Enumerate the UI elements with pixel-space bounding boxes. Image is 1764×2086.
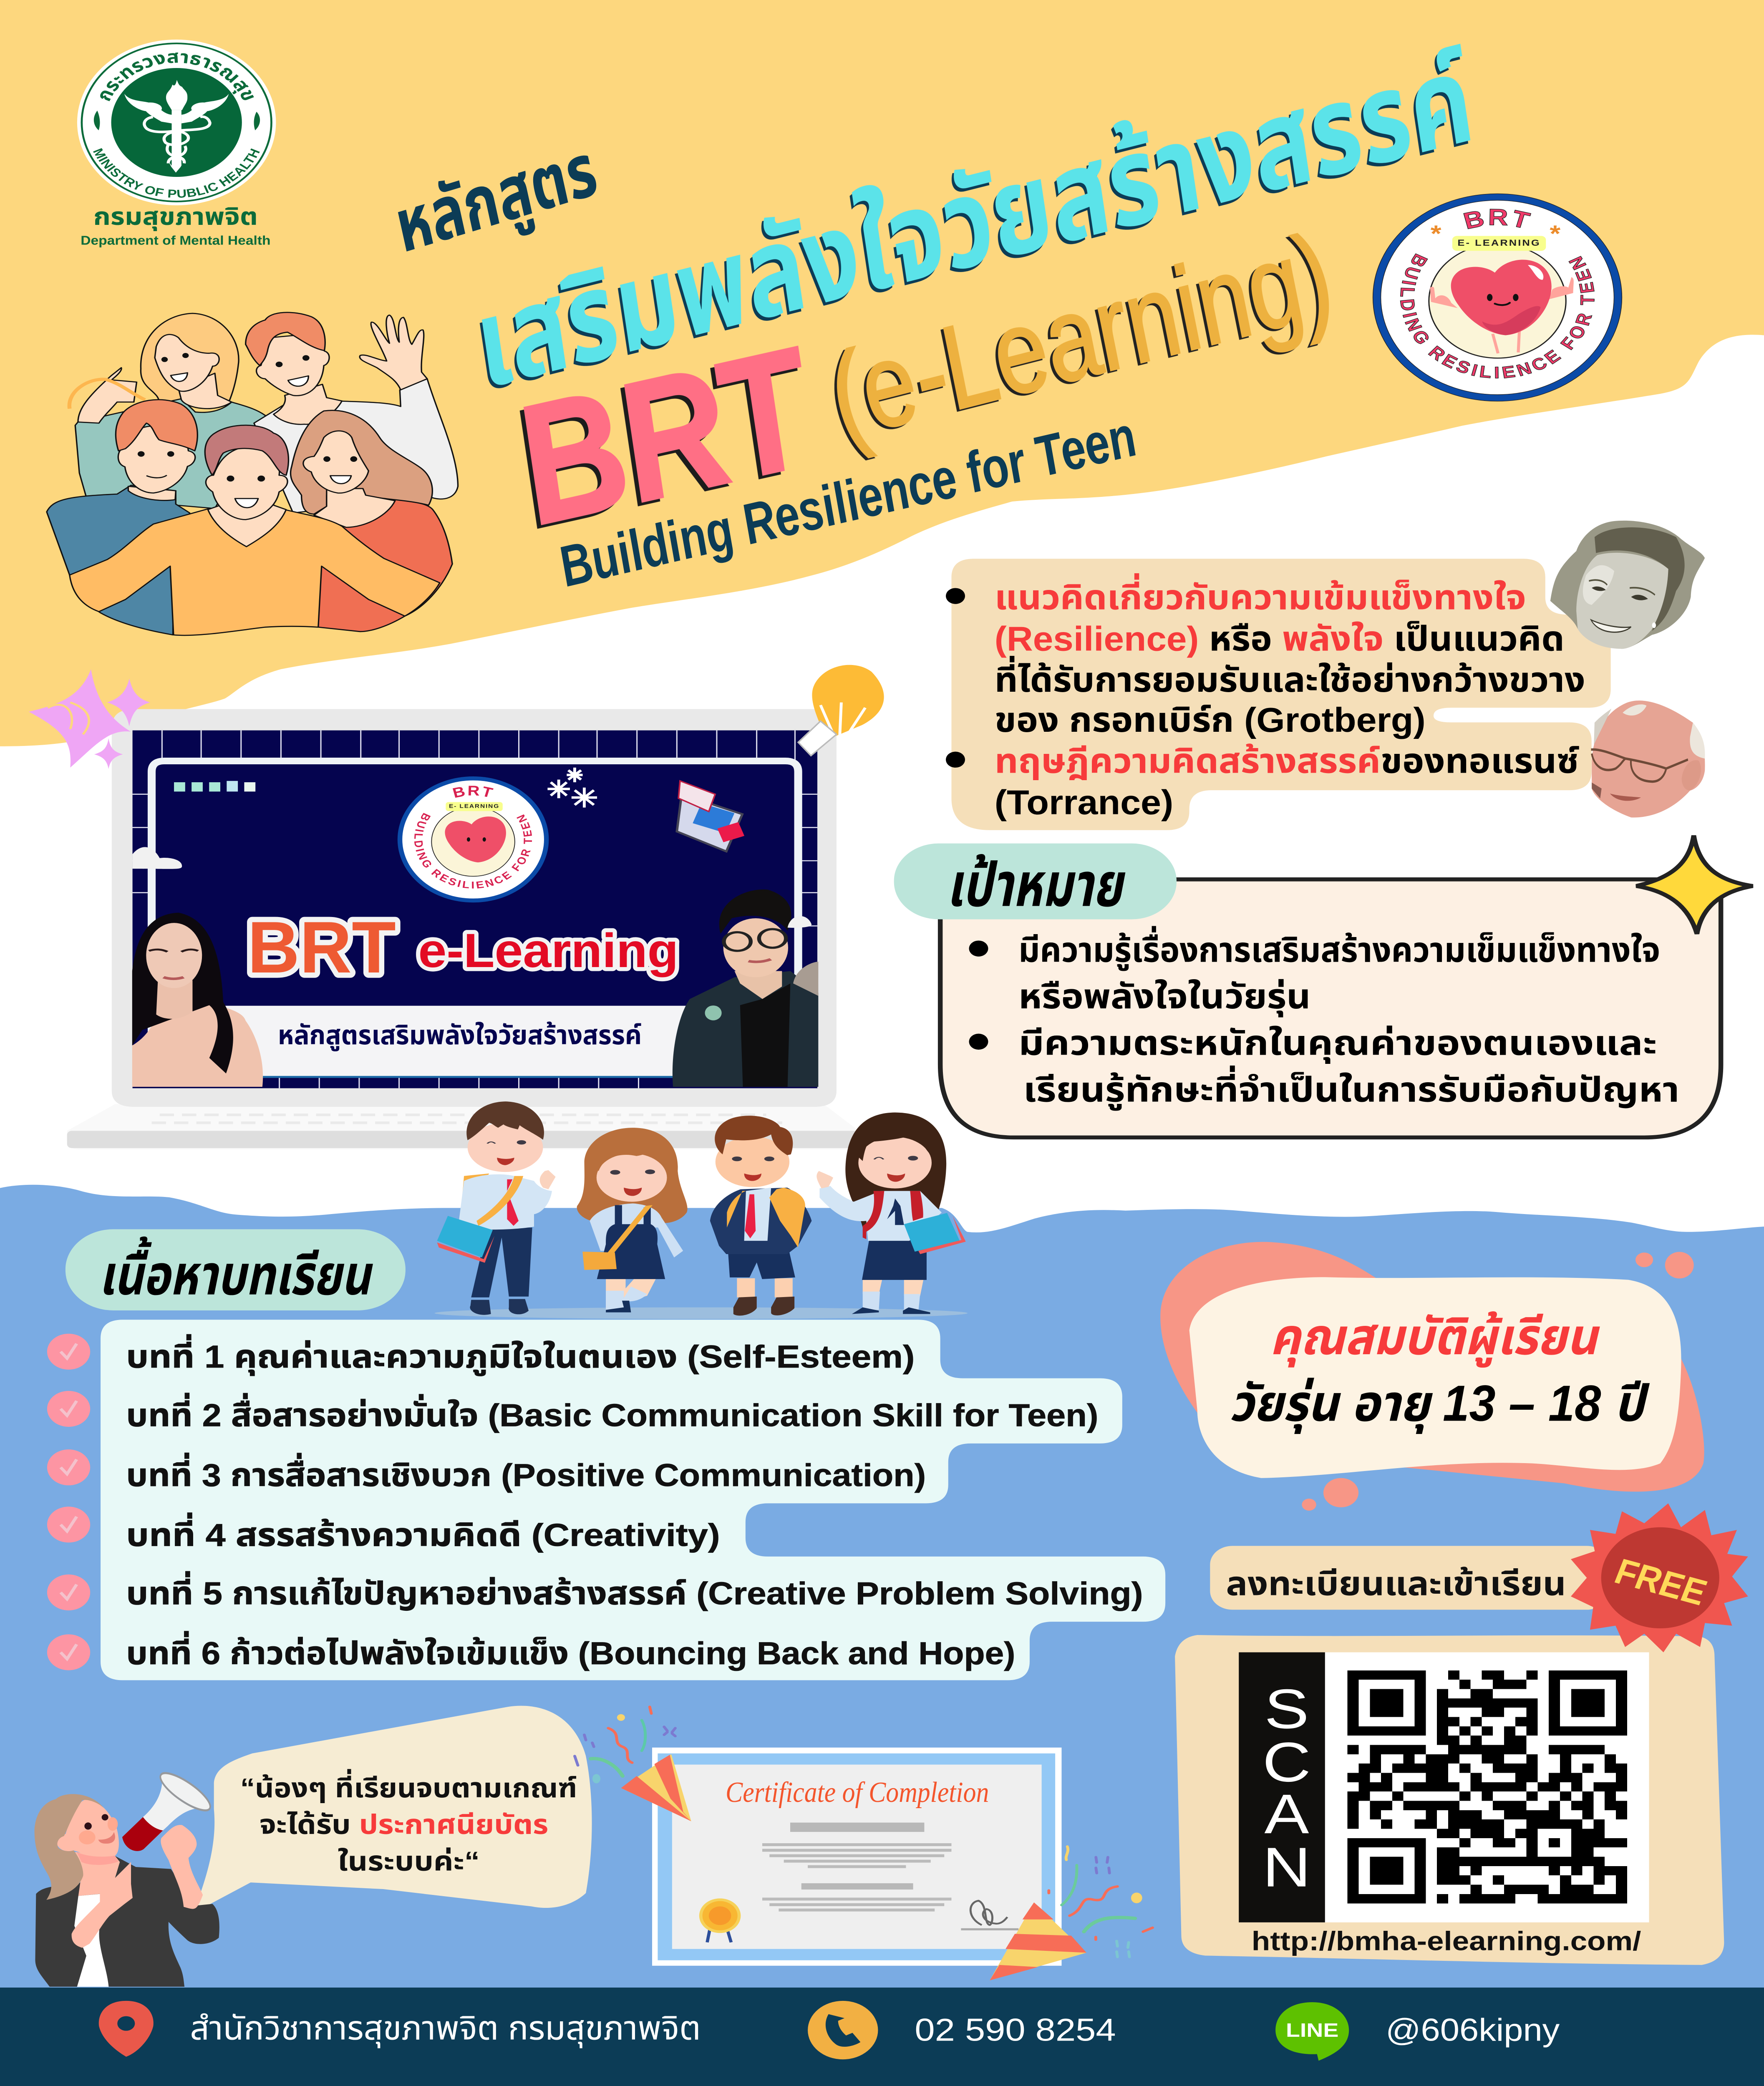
lesson text: บทที่ 2 สื่อสารอย่างมั่นใจ (Basic Communication Skill for Teen) <box>126 1393 1098 1433</box>
register pill: ลงทะเบียนและเข้าเรียน <box>1226 1565 1566 1602</box>
back woman <box>69 313 267 509</box>
boy three <box>710 1116 811 1315</box>
scan strip: A <box>1264 1783 1309 1845</box>
background: blue lower wave <box>0 1185 1764 1995</box>
certificate lines <box>762 1823 1018 1930</box>
goals text: เรียนรู้ทักษะที่จำเป็นในการรับมือกับปัญหา <box>1023 1066 1679 1111</box>
footer: location <box>99 2001 701 2057</box>
scan strip: C <box>1263 1731 1311 1794</box>
logo: ministry of public health: กรมสุขภาพจิต <box>93 204 258 231</box>
lesson text: บทที่ 5 การแก้ไขปัญหาอย่างสร้างสรรค์ (Creative Problem Solving) <box>126 1571 1143 1611</box>
badge: BRT building resilience for teen: BRT <box>1461 204 1535 234</box>
goals heading pill <box>894 844 1177 919</box>
confetti lower <box>1049 1847 1153 1957</box>
confetti upper <box>575 1707 675 1784</box>
lesson text: บทที่ 3 การสื่อสารเชิงบวก (Positive Communication) <box>126 1453 926 1493</box>
goals bullets <box>969 940 988 1050</box>
logo: ministry of public health: MINISTRY OF PUBLIC HEALTH <box>90 146 263 201</box>
background: yellow top wave <box>0 0 1764 746</box>
FREE seal <box>1571 1503 1748 1652</box>
FREE seal: FREE <box>1609 1551 1712 1613</box>
heading pill: lessons <box>66 1229 406 1310</box>
footer: phone <box>808 2001 1116 2059</box>
screen small badge: BRT <box>451 783 496 801</box>
party hat upper <box>621 1754 691 1821</box>
logo: ministry of public health <box>77 40 276 248</box>
resilience text: (Torrance) <box>995 783 1173 822</box>
certificate <box>652 1748 1061 1966</box>
icon: yellow four point star <box>1636 836 1753 934</box>
resilience text: แนวคิดเกี่ยวกับความเข้มแข็งทางใจ <box>995 573 1526 617</box>
badge: BRT building resilience for teen: BUILDING RESILIENCE FOR TEEN <box>1396 251 1599 382</box>
presenter man <box>673 889 818 1087</box>
certificate seal <box>701 1900 739 1942</box>
qualification heading: คุณสมบัติผู้เรียน <box>1270 1309 1600 1368</box>
footer band <box>0 1988 1764 2086</box>
screen small badge: E- LEARNING <box>449 804 499 809</box>
footer: LINE <box>1275 2002 1560 2061</box>
goals text <box>1018 926 1679 1111</box>
icon: light bulb <box>798 665 884 756</box>
qualification text: วัยรุ่น อายุ 13 – 18 ปี <box>1229 1376 1650 1434</box>
badge: BRT building resilience for teen: * <box>1431 221 1441 247</box>
illustration: group of five friends <box>47 312 458 635</box>
bubble text <box>240 1769 577 1877</box>
front center man in orange <box>70 425 440 635</box>
party hat lower <box>990 1902 1086 1980</box>
screen small badge <box>398 776 549 902</box>
icon: pink sparkles <box>29 669 150 769</box>
lesson text <box>126 1334 1143 1671</box>
resilience text: (Resilience) หรือ พลังใจ เป็นแนวคิด <box>995 620 1565 658</box>
bullets <box>946 588 965 768</box>
panel: learner qualification <box>1160 1242 1704 1511</box>
girl two <box>577 1128 688 1313</box>
girl four <box>816 1112 966 1314</box>
bubble text: จะได้รับ ประกาศนียบัตร <box>260 1810 548 1840</box>
right girl <box>290 411 452 632</box>
logo: ministry of public health: Department of Mental Health <box>81 234 271 248</box>
title: BRT: BRT <box>493 312 845 559</box>
lesson text: บทที่ 4 สรรสร้างความคิดดี (Creativity) <box>126 1512 720 1553</box>
scan strip: N <box>1263 1836 1311 1899</box>
badge: BRT building resilience for teen: E- LEARNING <box>1457 238 1541 247</box>
screen small badge: BUILDING RESILIENCE FOR TEEN <box>411 811 535 891</box>
bubble text: ในระบบค่ะ“ <box>338 1846 480 1877</box>
register pill <box>1210 1546 1609 1610</box>
panel: goals box <box>894 844 1721 1137</box>
title: english subtitle: Building Resilience for Teen <box>550 405 1144 599</box>
illustration: four students <box>435 1101 968 1319</box>
goals text: หรือพลังใจในวัยรุ่น <box>1018 977 1310 1018</box>
screen decor <box>174 781 255 791</box>
screen caption strip <box>224 1006 686 1076</box>
resilience text: ของ กรอทเบิร์ก (Grotberg) <box>995 701 1426 739</box>
check icons <box>47 1334 90 1670</box>
footer: phone: 02 590 8254 <box>915 2012 1116 2048</box>
screen computer icon <box>677 781 744 852</box>
laptop base <box>67 1104 859 1149</box>
QR white card <box>1239 1652 1649 1922</box>
portrait: Torrance <box>1591 700 1705 817</box>
badge: BRT building resilience for teen: * <box>1550 221 1560 247</box>
QR code <box>1348 1670 1627 1903</box>
footer: LINE: LINE <box>1286 2019 1338 2041</box>
bubble text: “น้องๆ ที่เรียนจบตามเกณฑ์ <box>240 1769 577 1804</box>
salmon blob <box>1160 1242 1704 1491</box>
panel: resilience concept <box>946 559 1611 830</box>
presenter woman <box>132 913 263 1087</box>
laptop screen <box>132 731 818 1088</box>
resilience text <box>995 573 1585 822</box>
panel: QR <box>1175 1635 1724 1965</box>
goals text: มีความตระหนักในคุณค่าของตนเองและ <box>1018 1024 1657 1064</box>
scan strip: S <box>1264 1678 1309 1740</box>
title: course label: หลักสูตร <box>376 131 612 271</box>
laptop screen: หลักสูตรเสริมพลังใจวัยสร้างสรรค์ <box>278 1020 642 1051</box>
footer: LINE: @606kipny <box>1386 2012 1560 2048</box>
laptop lid <box>112 709 837 1107</box>
resilience text: ทฤษฎีความคิดสร้างสรรค์ของทอแรนซ์ <box>995 742 1579 781</box>
lesson text: บทที่ 6 ก้าวต่อไปพลังใจเข้มแข็ง (Bouncing Back and Hope) <box>126 1631 1015 1671</box>
back man <box>246 312 458 513</box>
illustration: woman with megaphone <box>35 1766 219 1987</box>
panel: lesson list <box>47 1320 1165 1680</box>
lesson text: บทที่ 1 คุณค่าและความภูมิใจในตนเอง (Self-Esteem) <box>126 1334 915 1376</box>
resilience text: ที่ได้รับการยอมรับและใช้อย่างกว้างขวาง <box>995 656 1585 699</box>
screen title: BRT <box>247 907 396 988</box>
logo: ministry of public health: กระทรวงสาธารณสุข <box>92 47 262 104</box>
boy one <box>437 1101 556 1315</box>
portrait: Grotberg <box>1550 521 1705 649</box>
scan strip <box>1239 1652 1325 1922</box>
screen title <box>247 907 678 988</box>
illustration: laptop <box>67 709 859 1149</box>
certificate signature <box>970 1901 1007 1925</box>
goals heading pill: เป้าหมาย <box>947 851 1126 919</box>
heading pill: lessons: เนื้อหาบทเรียน <box>99 1236 373 1307</box>
front left boy <box>47 400 197 635</box>
speech bubble: certificate notice <box>193 1706 592 1913</box>
badge: BRT building resilience for teen <box>1373 194 1622 401</box>
cream blob <box>1189 1277 1681 1478</box>
website url: http://bmha-elearning.com/ <box>1252 1926 1641 1956</box>
certificate title: Certificate of Completion <box>726 1776 989 1809</box>
screen title: e-Learning <box>418 924 678 977</box>
title: e-Learning: (e-Learning) <box>809 210 1351 462</box>
floor shadow <box>435 1308 968 1319</box>
footer: location: สำนักวิชาการสุขภาพจิต กรมสุขภาพจิต <box>190 2009 701 2048</box>
